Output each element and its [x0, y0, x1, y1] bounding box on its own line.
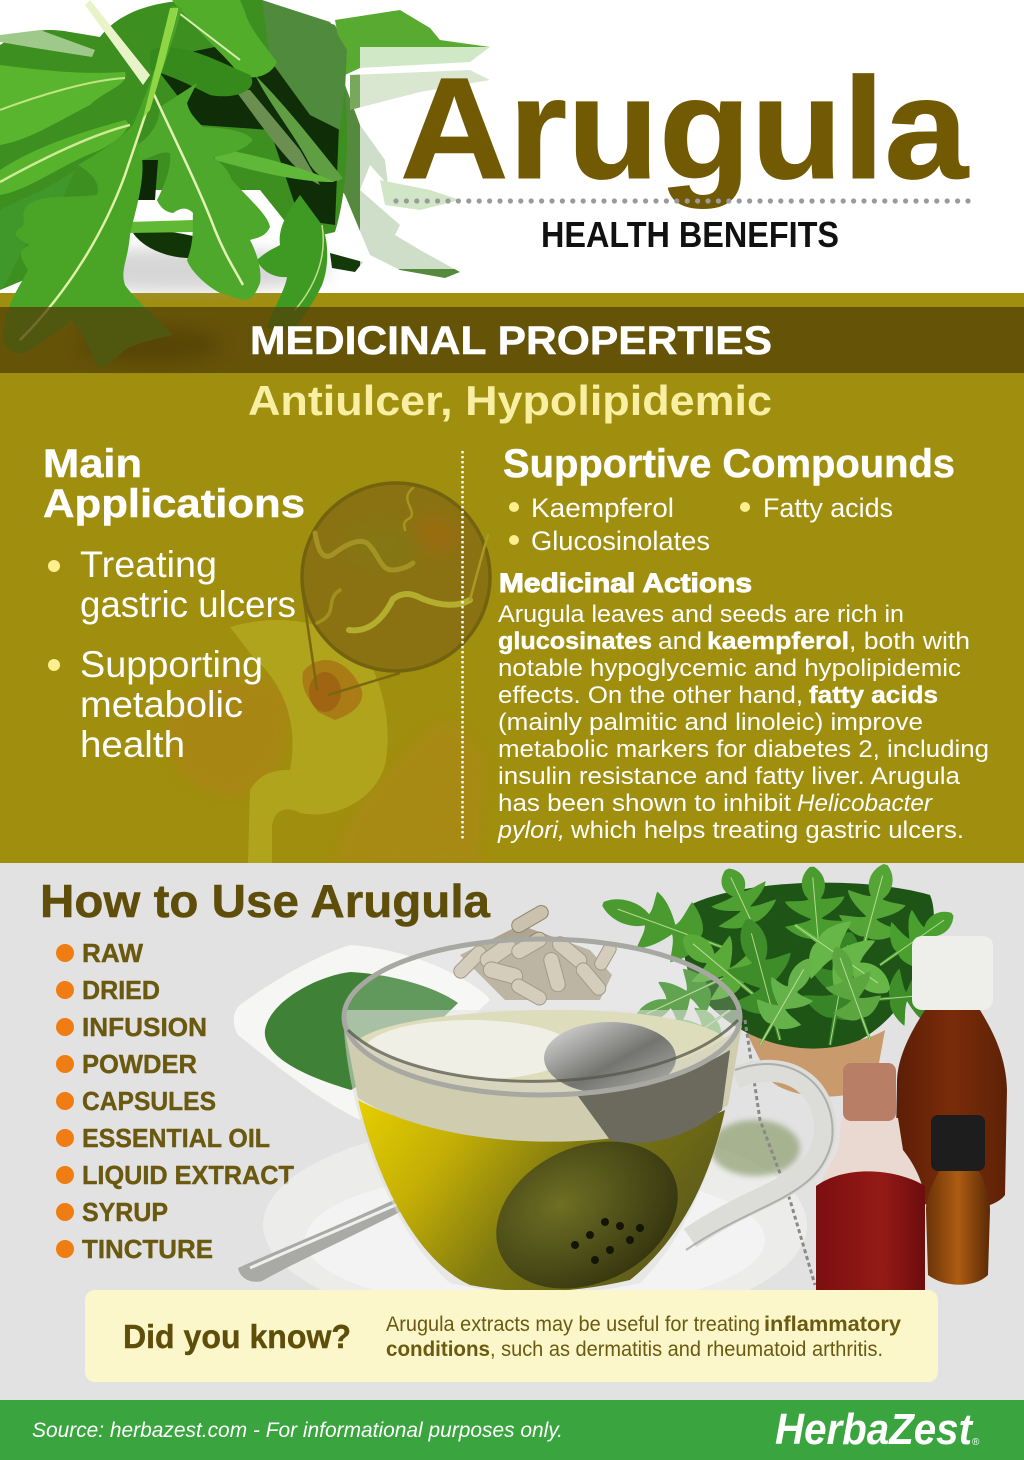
tea inner surface — [352, 1010, 728, 1108]
panel: how to use background — [0, 863, 1024, 1400]
left hand — [165, 677, 322, 796]
compound list: Glucosinolates — [531, 526, 710, 556]
item: capsules: CAPSULES — [82, 1086, 216, 1116]
title: Arugula — [400, 48, 969, 209]
bullet: treating gastric ulcers: Treating — [80, 544, 217, 585]
heading: main applications: Main — [43, 442, 142, 486]
magnifier circle — [302, 483, 490, 671]
glass front band — [345, 1025, 742, 1142]
right hand — [333, 722, 485, 863]
item: raw — [56, 938, 143, 968]
image: salad bowl — [592, 856, 969, 1096]
bullet: treating gastric ulcers — [48, 544, 296, 625]
tea — [358, 1100, 725, 1291]
bullet: supporting metabolic health: health — [80, 724, 185, 765]
ulcer spot — [309, 672, 341, 712]
compound list: Fatty acids — [763, 493, 893, 523]
subtitle: HEALTH BENEFITS — [541, 214, 839, 255]
magnifier pointers — [302, 587, 400, 695]
image: glass tea cup with infuser — [343, 939, 833, 1317]
callout text: conditions — [386, 1338, 490, 1361]
cup rim — [344, 939, 740, 1095]
item: raw: RAW — [82, 938, 143, 968]
text block: medicinal actions: which helps treating gastric ulcers. — [570, 817, 964, 844]
callout text — [386, 1313, 901, 1361]
infuser ball lower — [472, 1113, 702, 1317]
item: dried: DRIED — [82, 975, 160, 1005]
callout text: inflammatory — [764, 1313, 901, 1336]
subheading: properties: Antiulcer, Hypolipidemic — [248, 377, 772, 424]
heading: supportive compounds: Supportive Compounds — [503, 442, 955, 486]
illustration: stomach, hands and bacteria — [165, 483, 490, 863]
text block: medicinal actions: effects. On the other hand, — [498, 682, 803, 709]
bullet: supporting metabolic health: Supporting — [80, 644, 263, 685]
heading: medicinal properties: MEDICINAL PROPERTIES — [250, 319, 772, 363]
compound list: Kaempferol — [531, 493, 674, 523]
text block: medicinal actions: and — [658, 628, 702, 655]
heading band — [0, 307, 1024, 373]
infuser chain — [745, 1020, 815, 1285]
image: small amber bottle — [926, 1115, 990, 1285]
callout text: Arugula extracts may be useful for treating — [386, 1313, 760, 1336]
infuser under lip — [575, 1050, 730, 1143]
cup body — [343, 1010, 742, 1294]
text block: medicinal actions — [497, 601, 989, 844]
text block: medicinal actions: fatty acids — [809, 682, 938, 709]
column divider — [461, 451, 464, 839]
text block: medicinal actions: glucosinates — [498, 628, 652, 655]
text block: medicinal actions: kaempferol — [707, 628, 849, 655]
image: saucer and spoon — [238, 1120, 807, 1330]
compound list — [509, 493, 893, 556]
cup handle — [690, 1071, 825, 1238]
panel: supportive compounds — [497, 442, 989, 844]
rim front highlight — [348, 1020, 738, 1081]
text block: medicinal actions: insulin resistance and fatty liver. Arugula — [498, 763, 960, 790]
bullet: supporting metabolic health — [48, 644, 263, 765]
item: essential oil: ESSENTIAL OIL — [82, 1123, 270, 1153]
callout heading: Did you know? — [123, 1318, 351, 1355]
text block: medicinal actions: pylori, — [497, 817, 565, 844]
dotted divider — [396, 198, 970, 204]
cup handle edge — [686, 1064, 833, 1250]
logo: HerbaZest: ® — [972, 1437, 980, 1448]
bacteria — [315, 488, 488, 630]
heading: how to use arugula: How to Use Arugula — [40, 875, 490, 927]
item: syrup: SYRUP — [82, 1197, 168, 1227]
list: forms of use — [56, 938, 294, 1264]
infuser ball top — [544, 1022, 676, 1094]
item: powder: POWDER — [82, 1049, 197, 1079]
text block: medicinal actions: has been shown to inhibit — [498, 790, 791, 817]
ulcer region — [302, 660, 362, 720]
image: arugula leaves — [0, 0, 490, 367]
footer — [0, 1400, 1024, 1460]
text block: medicinal actions: notable hypoglycemic and hypolipidemic — [498, 655, 961, 682]
translucent title overlay — [360, 47, 1024, 269]
item: tincture: TINCTURE — [82, 1234, 213, 1264]
text block: medicinal actions: (mainly palmitic and linoleic) improve — [498, 709, 923, 736]
stomach shade — [230, 620, 388, 863]
text block: medicinal actions: Helicobacter — [797, 790, 933, 817]
image: capsules — [451, 903, 619, 1008]
heading: medicinal actions: Medicinal Actions — [499, 568, 752, 598]
text block: medicinal actions: , both with — [849, 628, 970, 655]
text block: medicinal actions: Arugula leaves and seeds are rich in — [498, 601, 904, 628]
logo: HerbaZest: HerbaZest — [775, 1405, 974, 1454]
source note: Source: herbazest.com - For informational purposes only. — [32, 1419, 563, 1442]
header background — [0, 0, 1024, 294]
item: infusion: INFUSION — [82, 1012, 207, 1042]
bullet: supporting metabolic health: metabolic — [80, 684, 243, 725]
herbs behind handle — [710, 1120, 800, 1176]
bullet: treating gastric ulcers: gastric ulcers — [80, 584, 296, 625]
callout text: , such as dermatitis and rheumatoid arthritis. — [490, 1338, 883, 1361]
text block: medicinal actions: metabolic markers for diabetes 2, including — [498, 736, 989, 763]
panel: main applications — [43, 442, 305, 765]
reflection on tea — [365, 1020, 575, 1080]
callout: did you know — [85, 1290, 938, 1382]
heading: main applications — [43, 442, 305, 526]
image: large amber syrup bottle — [895, 936, 1007, 1209]
item: liquid extract: LIQUID EXTRACT — [82, 1160, 294, 1190]
image: powder bowl — [234, 945, 490, 1120]
heading: main applications: Applications — [43, 482, 305, 526]
panel: olive medicinal background — [0, 293, 1024, 863]
image: red cork bottle — [816, 1063, 925, 1290]
